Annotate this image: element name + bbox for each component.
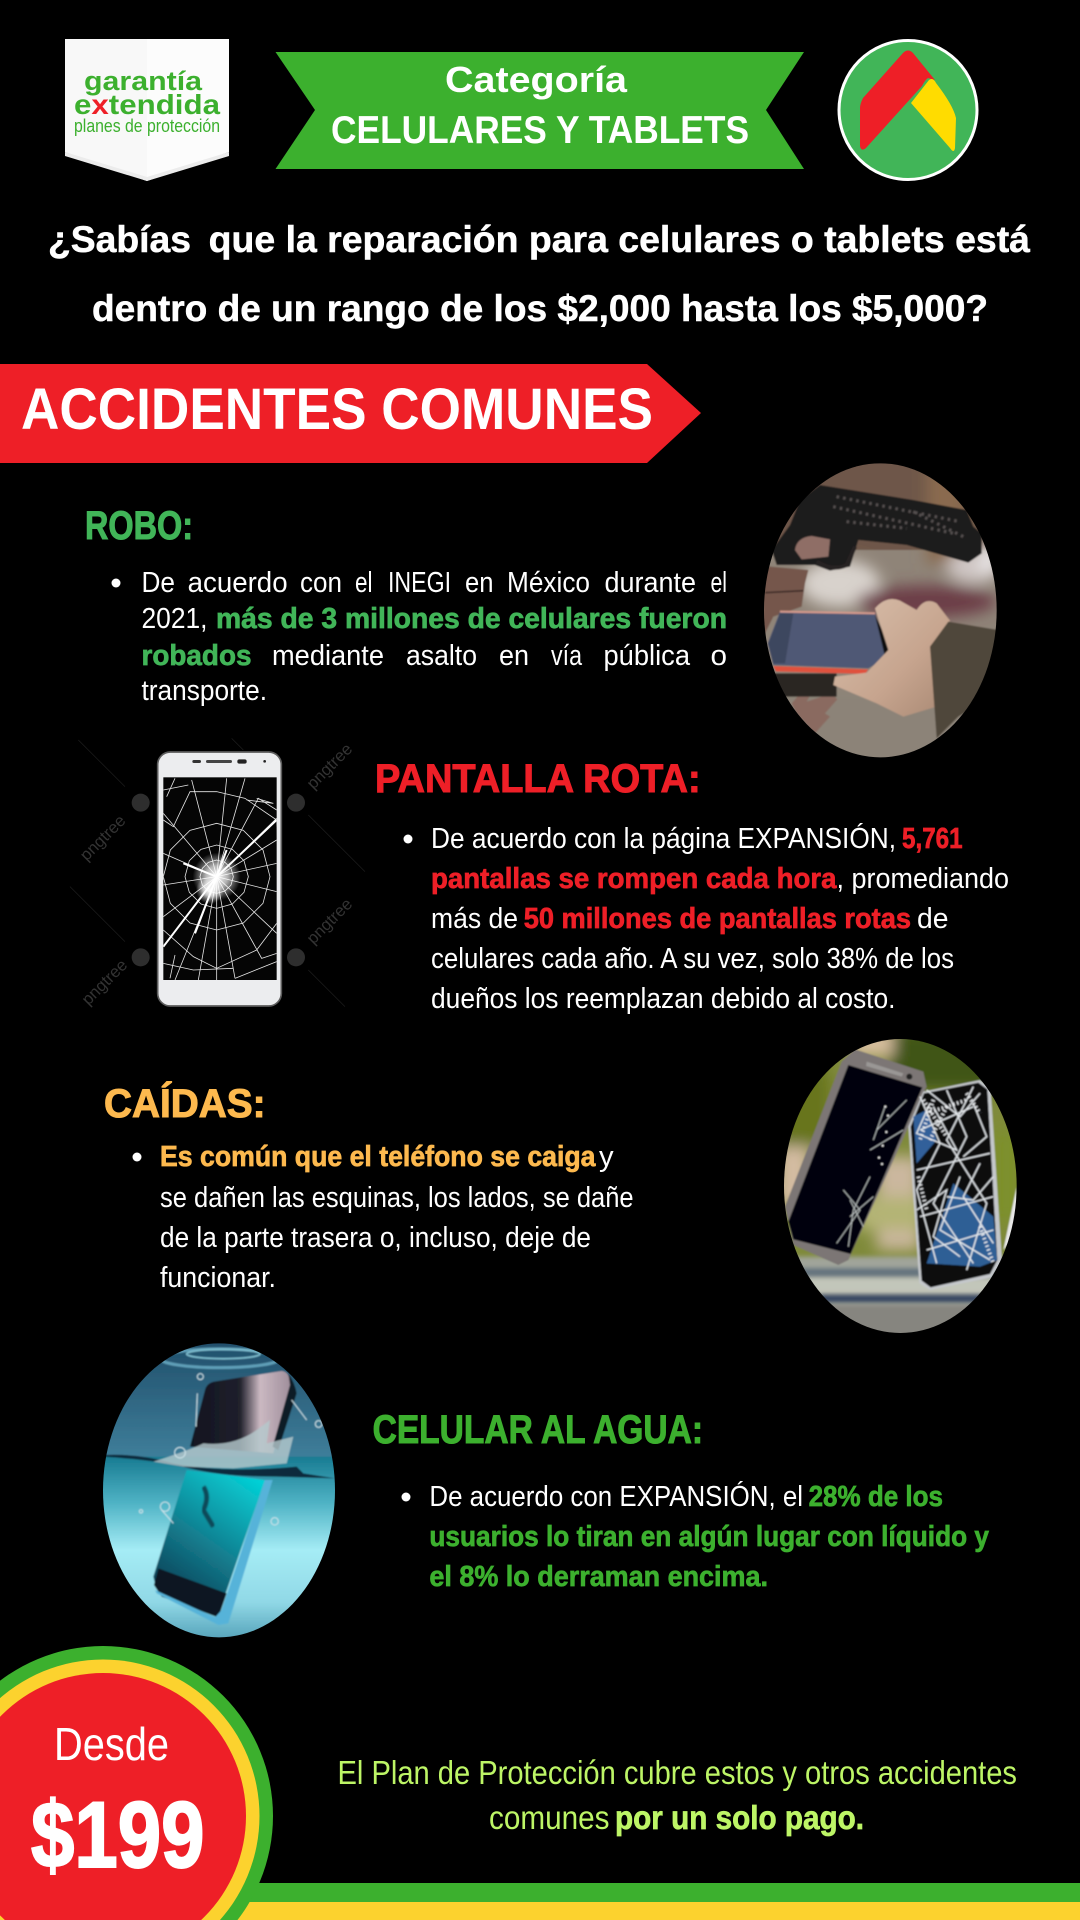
panel: pantalla rota — [70, 738, 1009, 1015]
text block: robo: durante — [604, 567, 696, 599]
text block: robo: 2021, — [142, 603, 208, 635]
heading: robo: ROBO: — [85, 504, 193, 548]
logo: garantía extendida: extendida — [74, 89, 220, 120]
text block: pantalla rota: dueños los reemplazan debido al costo. — [431, 983, 896, 1015]
water line — [103, 1455, 335, 1478]
right hand — [833, 599, 950, 717]
text block: robo: asalto — [406, 640, 477, 672]
text block: robo: acuerdo — [188, 567, 288, 599]
image: cracked white phone: pngtree — [76, 811, 129, 864]
heading: caídas: CAÍDAS: — [104, 1081, 266, 1126]
text block: robo: transporte. — [142, 675, 267, 707]
panel: celular al agua — [90, 1330, 989, 1643]
photo: phone in water — [103, 1343, 335, 1638]
photo: robbery at gunpoint — [764, 463, 997, 758]
text block: robo: o — [710, 640, 727, 672]
image: cracked white phone: pngtree — [303, 894, 356, 948]
photo: dropped phones — [784, 1039, 1017, 1333]
text block: robo: en — [499, 640, 529, 672]
text block: robo: el — [710, 567, 727, 599]
right phone — [908, 1080, 1002, 1290]
closing message — [338, 1754, 1017, 1836]
text block: caídas: funcionar. — [160, 1262, 276, 1294]
left phone — [785, 1049, 927, 1265]
price badge: $199 — [31, 1782, 204, 1887]
text block: celular al agua: 28% de los — [809, 1481, 943, 1513]
title ribbon: CELULARES Y TABLETS — [331, 109, 749, 152]
text block: celular al agua: De acuerdo con EXPANSIÓN, el — [429, 1480, 803, 1513]
text block: robo: vía — [551, 640, 583, 672]
heading: pantalla rota: PANTALLA ROTA: — [375, 757, 701, 801]
lower fingers — [792, 696, 837, 732]
text block: pantalla rota: más de — [431, 903, 518, 935]
logo: garantía extendida: garantía — [84, 66, 203, 96]
text block: caídas: se dañen las esquinas, los lados, se dañe — [160, 1182, 634, 1214]
text block: robo: el — [355, 567, 372, 599]
text block: robo — [112, 567, 727, 707]
text block: caídas: de la parte trasera o, incluso, deje de — [160, 1222, 591, 1254]
text block: robo: robados — [142, 640, 252, 672]
price badge — [0, 1646, 273, 1920]
text block: celular al agua — [402, 1480, 989, 1593]
text block: celular al agua: el 8% lo derraman encima. — [429, 1561, 768, 1593]
text block: celular al agua: usuarios lo tiran en algún lugar con líquido y — [429, 1521, 989, 1553]
sleeve — [930, 622, 998, 738]
text block: robo: mediante — [272, 640, 384, 672]
closing message: por un solo pago. — [615, 1799, 864, 1836]
gun — [772, 485, 982, 571]
text block: pantalla rota: , promediando — [836, 863, 1009, 895]
title ribbon: Categoría — [445, 59, 628, 100]
text block: pantalla rota — [404, 822, 1009, 1015]
panel: robo — [85, 450, 1020, 770]
text block: caídas: y — [599, 1141, 614, 1173]
section banner: accidentes comunes: ACCIDENTES COMUNES — [21, 377, 653, 442]
title ribbon — [276, 52, 804, 169]
text block: pantalla rota: De acuerdo con la página EXPANSIÓN, — [431, 822, 896, 855]
phone upper — [190, 1371, 290, 1453]
footer stripes — [200, 1883, 1080, 1920]
text block: pantalla rota: 5,761 — [902, 823, 963, 855]
image: cracked white phone — [70, 738, 365, 1009]
logo: garantía extendida — [65, 39, 229, 181]
text block: robo: con — [300, 567, 342, 599]
image: cracked white phone: pngtree — [78, 955, 131, 1009]
headline question: dentro de un rango de los $2,000 hasta los $5,000? — [92, 288, 988, 329]
text block: robo: en — [465, 567, 494, 599]
text block: robo: pública — [604, 640, 691, 672]
text block: caídas — [132, 1141, 634, 1294]
section banner: accidentes comunes — [0, 364, 701, 463]
text block: robo: INEGI — [388, 567, 451, 599]
headline question: que la reparación para celulares o tablets está — [209, 219, 1030, 260]
text block: pantalla rota: 50 millones de pantallas rotas — [524, 903, 911, 935]
text block: caídas: Es común que el teléfono se caiga — [160, 1141, 596, 1173]
headline question — [48, 219, 1030, 329]
logo: round emblem — [839, 40, 977, 180]
text block: pantalla rota: de — [917, 903, 948, 935]
text block: pantalla rota: celulares cada año. A su vez, solo 38% de los — [431, 943, 954, 975]
panel: caídas — [105, 1039, 1017, 1333]
text block: robo: más de 3 millones de celulares fueron — [216, 603, 727, 635]
image: cracked white phone: pngtree — [303, 739, 356, 793]
logo: garantía extendida: planes de protección — [74, 116, 220, 136]
text block: robo: De — [142, 567, 175, 599]
splash — [153, 1420, 293, 1468]
phone lower — [153, 1470, 265, 1600]
price badge: Desde — [54, 1718, 169, 1770]
text block: robo: México — [507, 567, 590, 599]
heading: celular al agua: CELULAR AL AGUA: — [373, 1408, 703, 1452]
text block: pantalla rota: pantallas se rompen cada hora — [431, 863, 837, 895]
phone — [768, 612, 888, 668]
closing message: comunes — [489, 1799, 610, 1836]
headline question: ¿Sabías — [48, 219, 191, 260]
